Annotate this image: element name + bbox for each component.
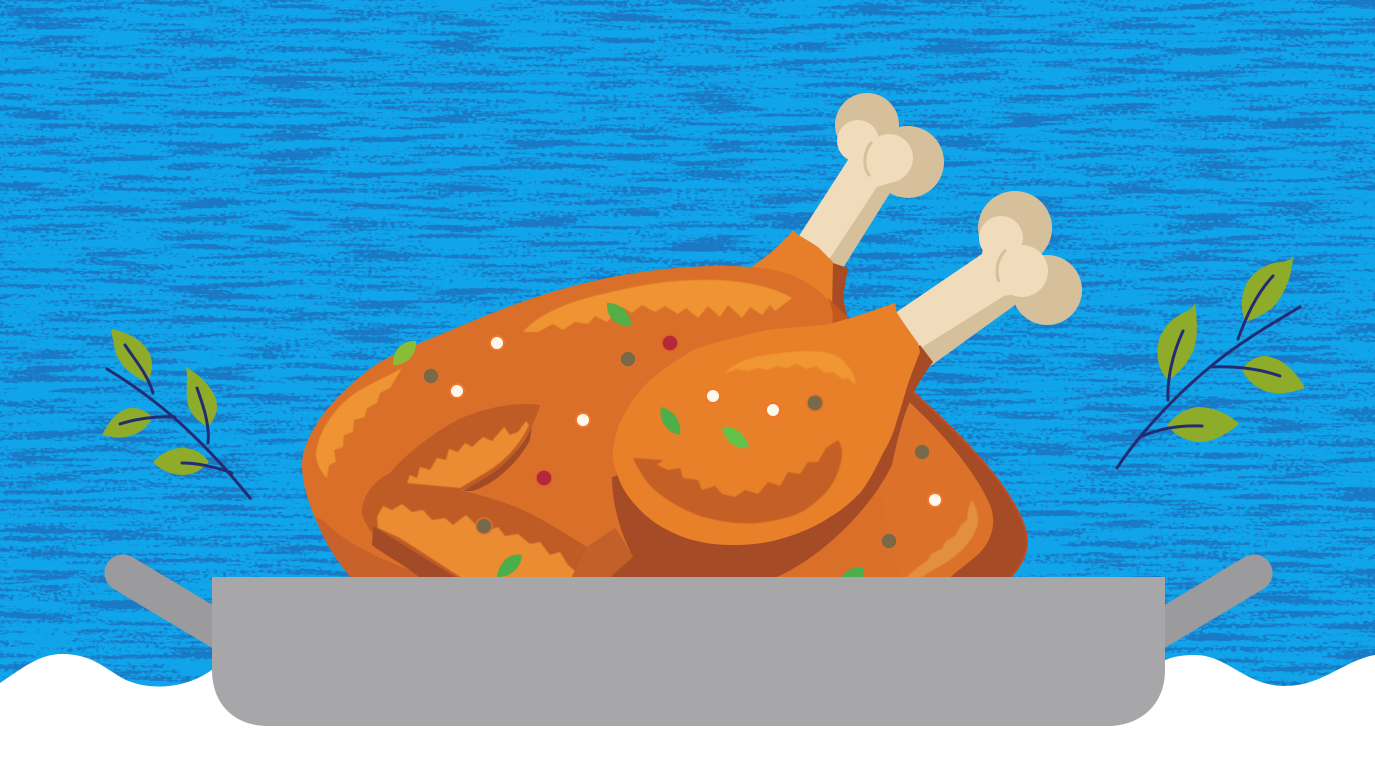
highlight: top of breast <box>523 280 792 332</box>
drumstick: lower dark crescent <box>633 440 842 523</box>
white wavy ground <box>0 654 1375 768</box>
pan handle: right <box>1152 573 1254 634</box>
right lobe highlight <box>903 500 978 580</box>
back leg <box>750 230 833 310</box>
body: lower-left shading <box>315 517 432 580</box>
spice: white peppercorns <box>450 336 942 507</box>
sprig: left herb branch <box>102 329 250 498</box>
wing tip shadow <box>600 345 933 580</box>
front drumstick <box>612 303 920 545</box>
highlight: left side <box>316 368 402 478</box>
wing: dark base <box>362 404 633 580</box>
spice: red peppercorns <box>536 335 678 486</box>
wing: upper feather highlight <box>407 421 529 488</box>
back leg: dark strip <box>820 262 848 330</box>
body: right lobe dark <box>760 385 1027 580</box>
wing: very dark strip, upper feather <box>463 425 532 491</box>
pan handle: left <box>123 573 225 634</box>
spice: brown peppercorns <box>423 351 930 549</box>
roasting pan <box>212 577 1165 726</box>
wing: lower feather dark strip <box>372 526 460 580</box>
wing: lower feather highlight <box>377 504 583 580</box>
body: main <box>302 266 900 580</box>
body: right lobe <box>770 398 993 580</box>
sprig: right herb branch <box>1117 257 1305 468</box>
herb flecks <box>393 303 863 580</box>
drumstick: highlight <box>725 351 856 385</box>
wing: elbow patch <box>570 528 633 580</box>
bone: back drumstick <box>790 93 944 276</box>
body: crescent behind drumstick <box>828 298 848 326</box>
bone: front drumstick <box>885 191 1082 370</box>
